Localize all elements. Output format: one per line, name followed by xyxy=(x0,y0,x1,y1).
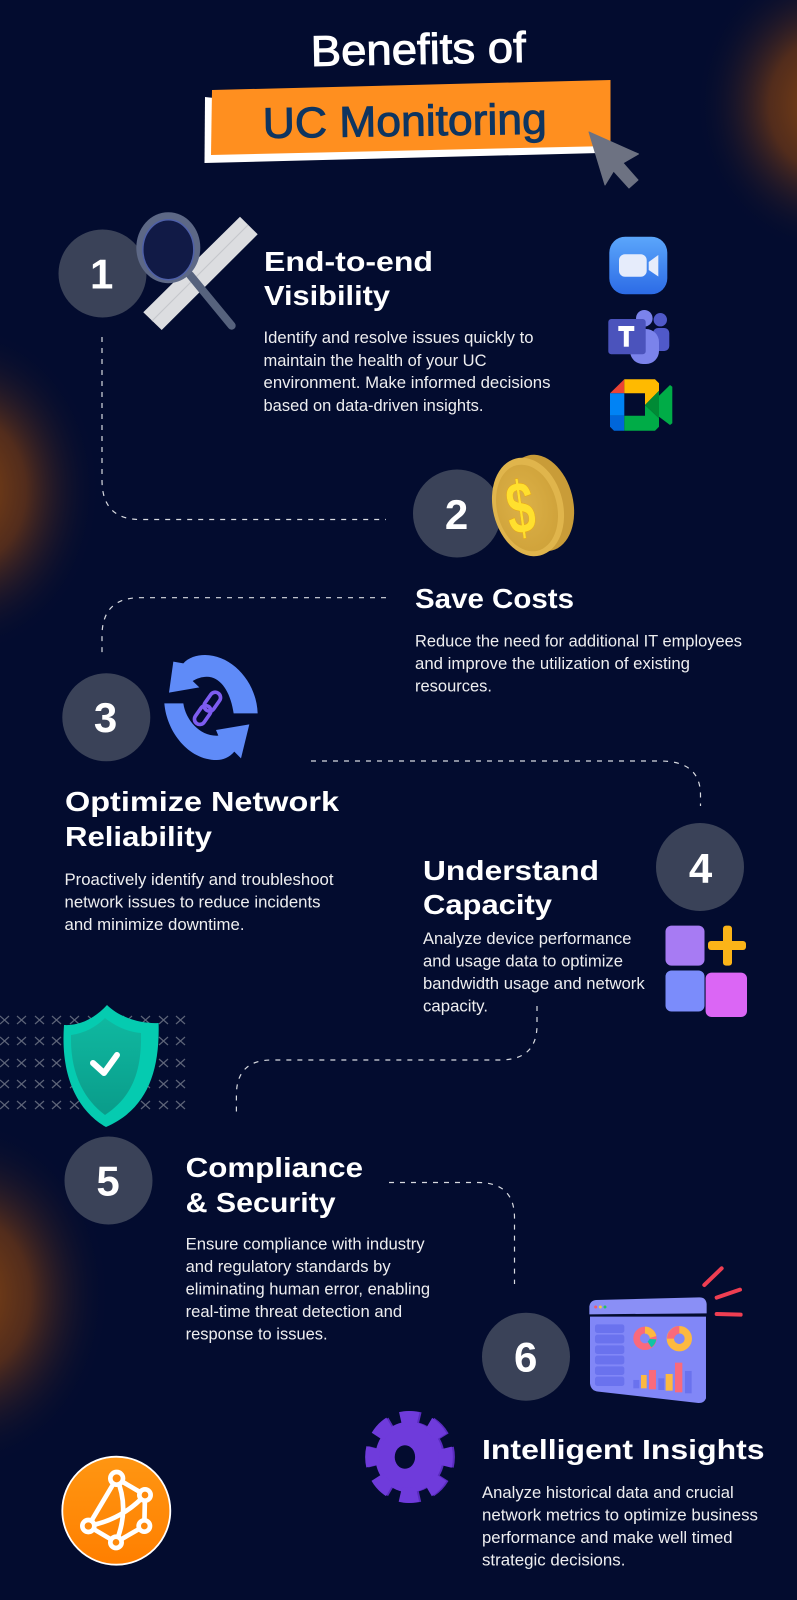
body text: network metrics to optimize business xyxy=(482,1506,758,1524)
body text: bandwidth usage and network xyxy=(423,974,645,993)
number badge 1 xyxy=(58,230,146,318)
number 3: 3 xyxy=(94,694,117,741)
body text: Analyze historical data and crucial xyxy=(482,1483,734,1502)
body text: based on data-driven insights. xyxy=(264,396,484,415)
body text: and minimize downtime. xyxy=(64,915,244,934)
icon: coin: $ xyxy=(501,466,540,551)
heading: Save Costs xyxy=(415,583,574,614)
banner orange xyxy=(211,80,610,155)
body text: strategic decisions. xyxy=(482,1551,625,1570)
body text xyxy=(423,929,645,1016)
step 4 xyxy=(423,823,747,1017)
banner white backing xyxy=(204,97,600,163)
heading: End-to-end xyxy=(264,246,433,277)
icon: magnifier and ruler xyxy=(136,212,258,330)
step 5: & Security xyxy=(186,1187,336,1218)
body text: resources. xyxy=(415,676,492,696)
body text: Analyze device performance xyxy=(423,929,632,948)
number 6: 6 xyxy=(514,1334,537,1380)
step 3 xyxy=(62,655,340,934)
title line: Benefits of: Benefits of xyxy=(310,24,527,76)
step 1 xyxy=(58,212,550,415)
step 2 xyxy=(413,447,742,696)
connector 2 to 3 xyxy=(102,598,386,653)
body text: and usage data to optimize xyxy=(423,952,623,970)
body text xyxy=(186,1234,430,1344)
body text: Proactively identify and troubleshoot xyxy=(64,870,334,889)
number badge 3 xyxy=(62,673,150,761)
number 4: 4 xyxy=(689,845,713,892)
body text: Reduce the need for additional IT employees xyxy=(415,632,742,650)
heading: Optimize Network xyxy=(65,786,340,817)
x pattern xyxy=(0,1016,185,1109)
logo xyxy=(62,1457,170,1565)
icon: cursor xyxy=(589,132,638,188)
heading: Intelligent Insights xyxy=(482,1434,765,1465)
step 5 xyxy=(63,1005,430,1344)
number 2: 2 xyxy=(445,491,468,538)
body text: network issues to reduce incidents xyxy=(64,892,320,912)
number badge 5 xyxy=(64,1136,152,1224)
title xyxy=(204,24,610,163)
body text: maintain the health of your UC xyxy=(264,351,486,370)
step 6 xyxy=(372,1268,765,1570)
body text: response to issues. xyxy=(186,1324,328,1344)
body text: real-time threat detection and xyxy=(186,1302,402,1321)
number badge 2 xyxy=(413,470,501,558)
number 5: 5 xyxy=(96,1158,120,1204)
connector 1 to 2 xyxy=(102,337,386,520)
body text: Ensure compliance with industry xyxy=(186,1234,425,1254)
connector 5 to 6 xyxy=(389,1182,514,1284)
icon: sync with link xyxy=(164,655,258,760)
icon: shield xyxy=(63,1005,159,1127)
body text: environment. Make informed decisions xyxy=(264,373,550,392)
title line: UC Monitoring: UC Monitoring xyxy=(262,96,547,148)
number badge 6 xyxy=(482,1313,570,1401)
icon: dashboard xyxy=(589,1268,741,1403)
body text: capacity. xyxy=(423,996,488,1016)
icon: gear xyxy=(372,1418,448,1496)
body text: Identify and resolve issues quickly to xyxy=(264,328,534,347)
icon: Teams app xyxy=(608,310,669,364)
connector 3 to 4 xyxy=(311,761,700,806)
body text xyxy=(482,1483,758,1570)
body text xyxy=(264,328,550,415)
connector 4 to 5 xyxy=(236,1006,537,1116)
step 3: Reliability xyxy=(65,821,213,852)
body text: eliminating human error, enabling xyxy=(186,1280,430,1299)
icon: Google Meet app xyxy=(610,379,672,431)
body text: performance and make well timed xyxy=(482,1528,733,1547)
icon: coin xyxy=(482,447,584,564)
body text xyxy=(64,870,334,934)
step 1: Visibility xyxy=(264,280,391,311)
body text: and regulatory standards by xyxy=(186,1257,391,1276)
icon: Zoom app xyxy=(609,237,667,294)
number 1: 1 xyxy=(90,250,113,298)
body text: and improve the utilization of existing xyxy=(415,654,690,673)
number badge 4 xyxy=(656,823,744,911)
icon: app blocks xyxy=(666,926,747,1017)
heading: Understand xyxy=(423,855,599,886)
body text xyxy=(415,632,742,696)
heading: Compliance xyxy=(186,1152,363,1183)
step 4: Capacity xyxy=(423,889,553,920)
